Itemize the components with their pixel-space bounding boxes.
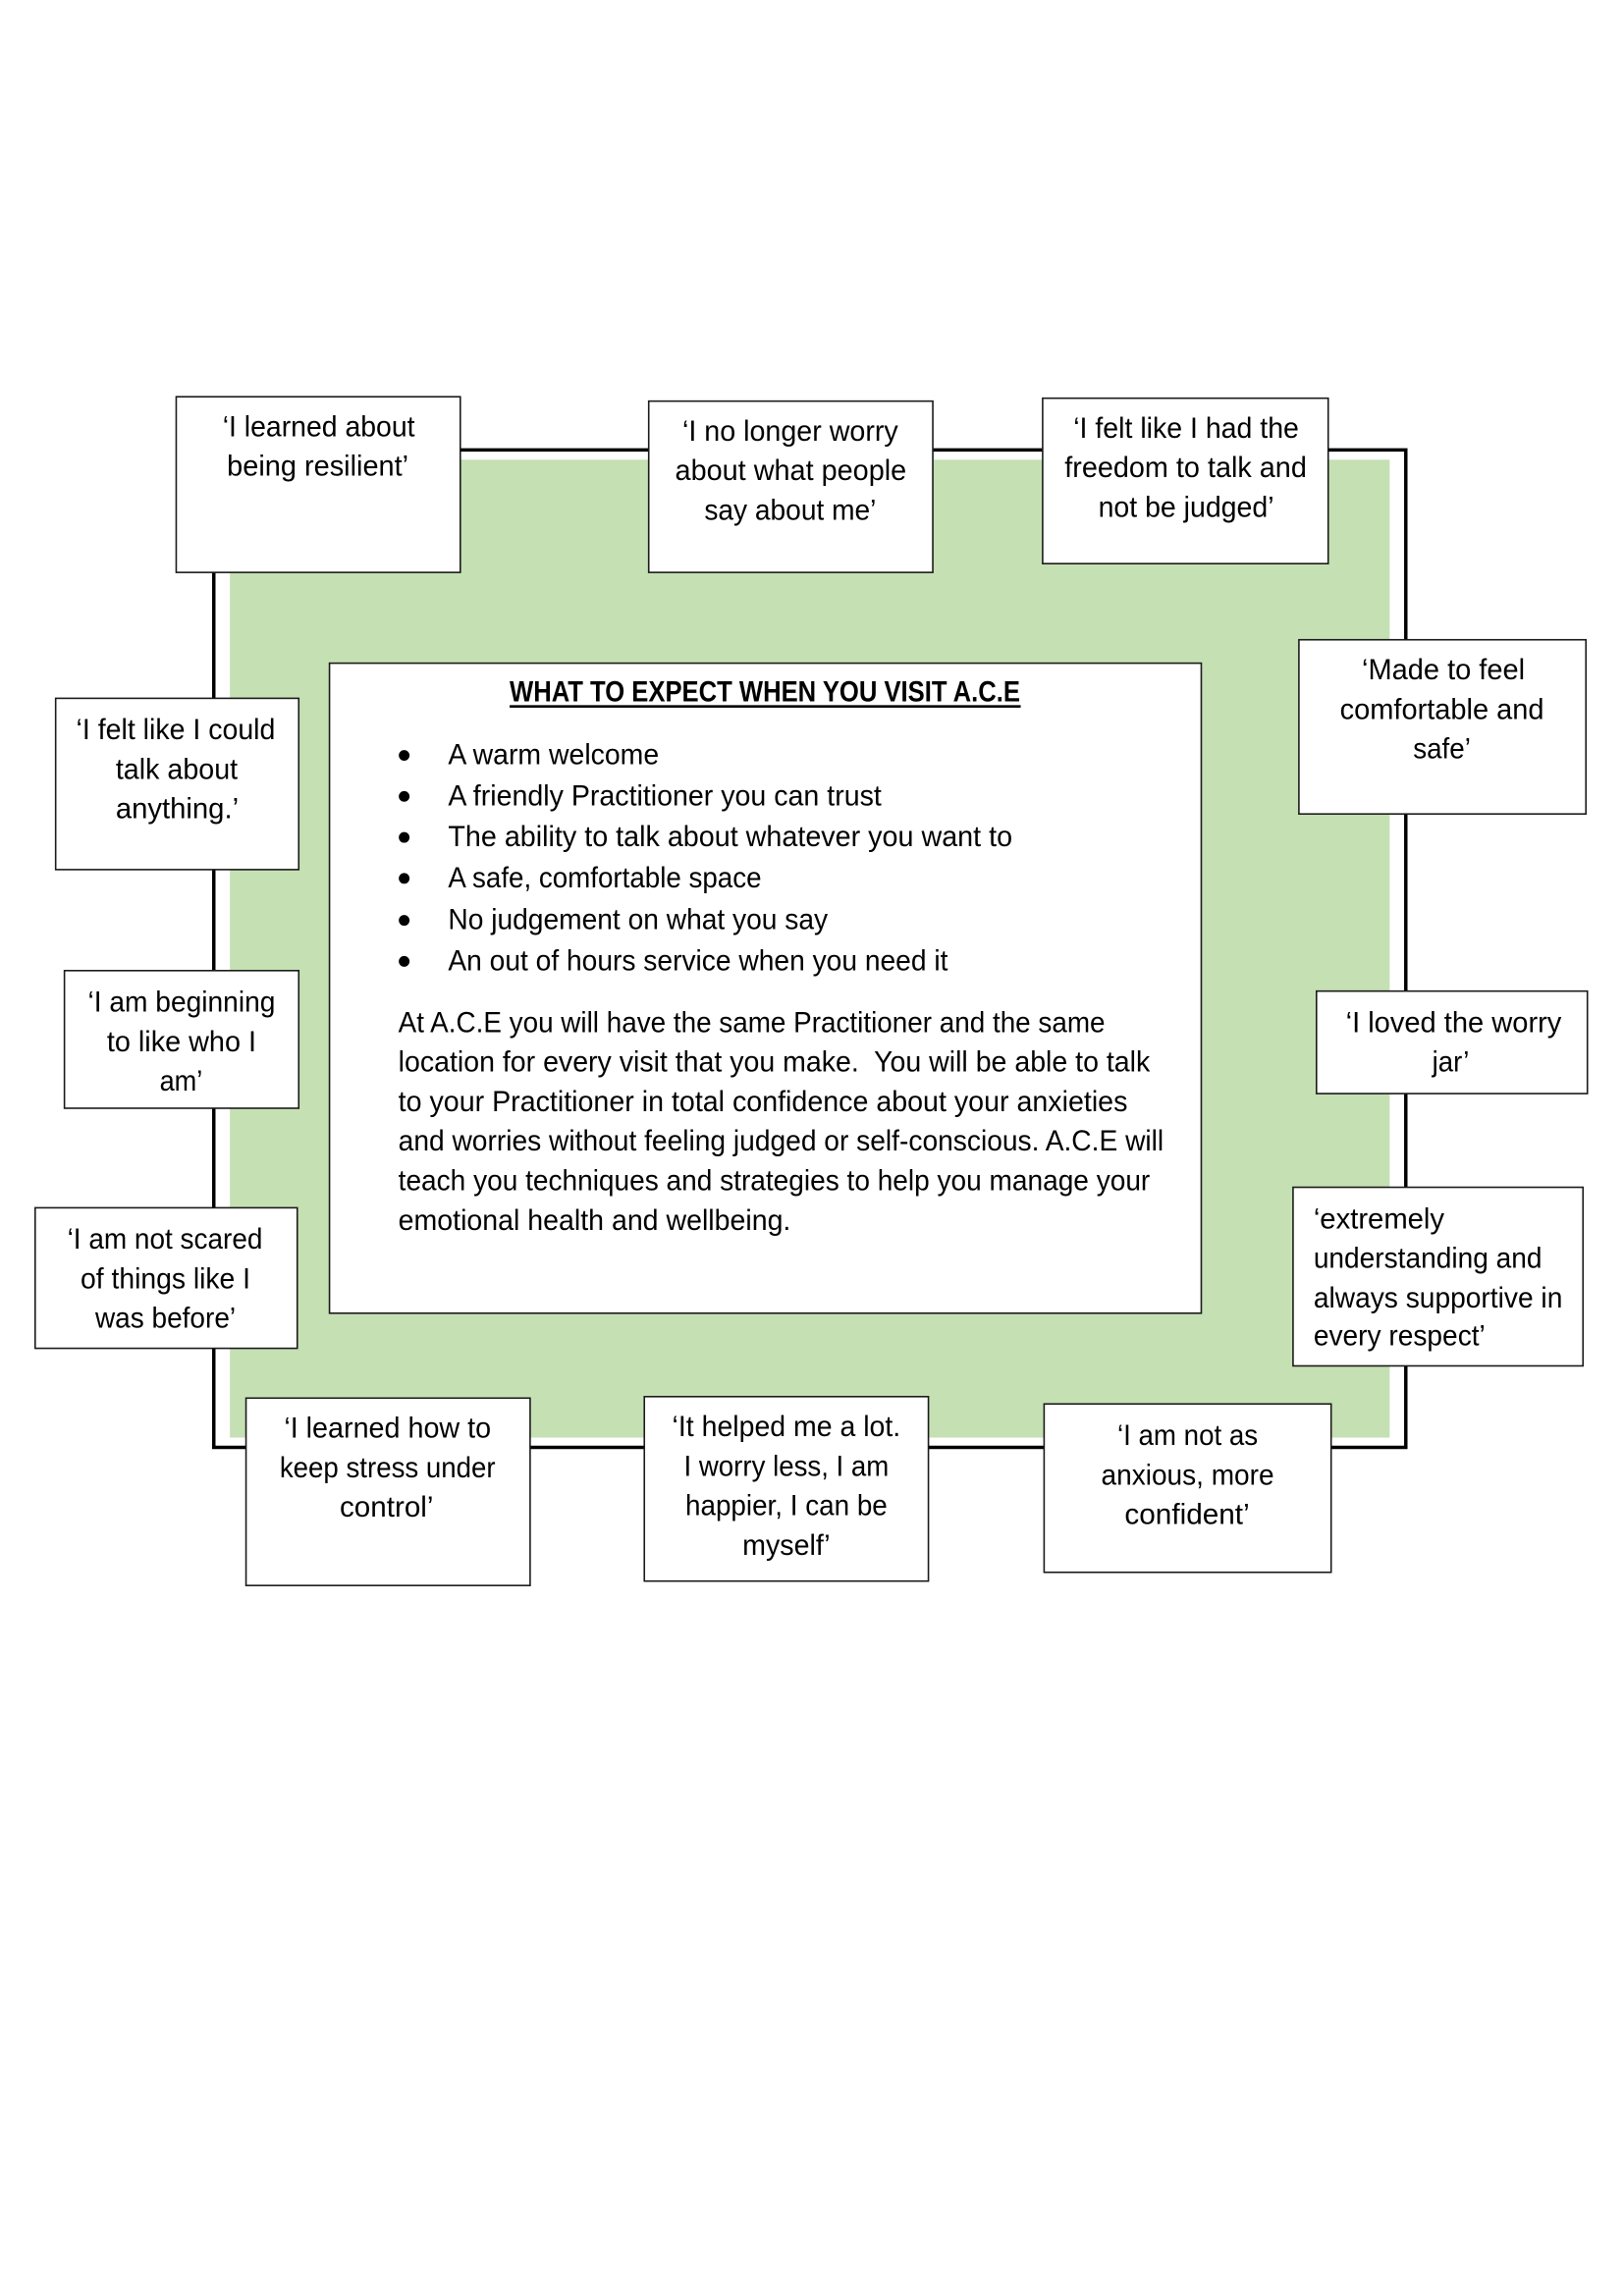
quote: helped me a lot: myself’: [742, 1529, 831, 1562]
quote: beginning to like who I am: [65, 971, 298, 1108]
bullet list: A friendly Practitioner you can trust: [448, 779, 882, 812]
quote: extremely understanding: ‘extremely: [1314, 1202, 1444, 1235]
quote: no longer worry: [649, 401, 933, 572]
body paragraph: teach you techniques and strategies to help you manage your: [399, 1165, 1150, 1198]
body paragraph: [399, 1006, 1164, 1237]
quote: keep stress under control: [246, 1398, 530, 1585]
quote: comfortable and safe: ‘Made to feel: [1362, 654, 1525, 686]
quote: freedom to talk: not be judged’: [1099, 491, 1274, 523]
quote: not as anxious, more confident: ‘I am not as: [1117, 1419, 1258, 1452]
quote: loved the worry jar: ‘I loved the worry: [1346, 1006, 1562, 1039]
quote: talk about anything: anything.’: [116, 793, 239, 826]
body paragraph: At A.C.E you will have the same Practitioner and the same: [399, 1006, 1106, 1039]
quote: no longer worry: about what people: [676, 454, 906, 487]
green background panel: [230, 459, 1389, 1438]
bullet list: An out of hours service when you need it: [448, 944, 947, 977]
panel: what to expect: [330, 664, 1201, 1313]
body paragraph: location for every visit that you make. You will be able to talk: [399, 1046, 1151, 1079]
quote: extremely understanding: always supportive in: [1314, 1282, 1562, 1314]
bullet list: No judgement on what you say: [448, 904, 828, 936]
quote: loved the worry jar: [1317, 991, 1588, 1094]
quote: helped me a lot: happier, I can be: [685, 1490, 888, 1522]
body paragraph: emotional health and wellbeing.: [399, 1204, 790, 1237]
quote: not scared of things: of things like I: [81, 1262, 250, 1295]
bullet list: The ability to talk about whatever you want to: [448, 821, 1012, 853]
quote: helped me a lot: [644, 1397, 929, 1581]
body paragraph: to your Practitioner in total confidence about your anxieties: [399, 1086, 1127, 1118]
quote: talk about anything: talk about: [116, 753, 238, 785]
quote: beginning to like who I am: ‘I am beginning: [87, 987, 275, 1019]
quote: learned about being resilient: being resilient’: [227, 451, 408, 483]
quote: talk about anything: [56, 698, 298, 870]
quote: beginning to like who I am: am’: [160, 1065, 202, 1097]
quote: talk about anything: ‘I felt like I could: [77, 714, 275, 746]
quote: keep stress under control: keep stress under: [280, 1452, 496, 1484]
quote: comfortable and safe: safe’: [1413, 733, 1471, 766]
quote: not as anxious, more confident: confident’: [1124, 1499, 1250, 1531]
quote: not as anxious, more confident: anxious, more: [1102, 1459, 1274, 1491]
bullet list: [399, 739, 1012, 977]
quote: learned about being resilient: ‘I learned about: [223, 410, 415, 443]
quote: extremely understanding: understanding and: [1314, 1243, 1542, 1275]
body paragraph: and worries without feeling judged or self-conscious. A.C.E will: [399, 1125, 1164, 1157]
quote: freedom to talk: [1043, 399, 1328, 563]
bullet list: A warm welcome: [448, 739, 659, 772]
quote: loved the worry jar: jar’: [1432, 1046, 1469, 1079]
quote: not as anxious, more confident: [1044, 1404, 1331, 1573]
quote: no longer worry: ‘I no longer worry: [682, 415, 898, 448]
quote: helped me a lot: ‘It helped me a lot.: [673, 1411, 900, 1443]
quote: comfortable and safe: [1299, 640, 1586, 814]
quote: freedom to talk: freedom to talk and: [1064, 452, 1307, 484]
quote: not scared of things: was before’: [94, 1303, 236, 1335]
quote: keep stress under control: ‘I learned how to: [284, 1413, 491, 1445]
quote: learned about being resilient: [176, 397, 460, 572]
heading: WHAT TO EXPECT WHEN YOU VISIT A.C.E: [510, 675, 1020, 708]
quote: beginning to like who I am: to like who I: [107, 1026, 256, 1058]
quote: extremely understanding: [1293, 1188, 1583, 1365]
quote: helped me a lot: I worry less, I am: [683, 1450, 889, 1482]
quote: not scared of things: ‘I am not scared: [68, 1223, 262, 1255]
quote: not scared of things: [35, 1207, 298, 1349]
black outer frame: [214, 450, 1406, 1447]
bullet list: A safe, comfortable space: [448, 862, 762, 894]
quote: extremely understanding: every respect’: [1314, 1320, 1486, 1353]
quote: comfortable and safe: comfortable and: [1340, 693, 1543, 725]
quote: keep stress under control: control’: [340, 1491, 433, 1523]
quote: freedom to talk: ‘I felt like I had the: [1073, 412, 1299, 445]
quote: no longer worry: say about me’: [704, 494, 876, 526]
